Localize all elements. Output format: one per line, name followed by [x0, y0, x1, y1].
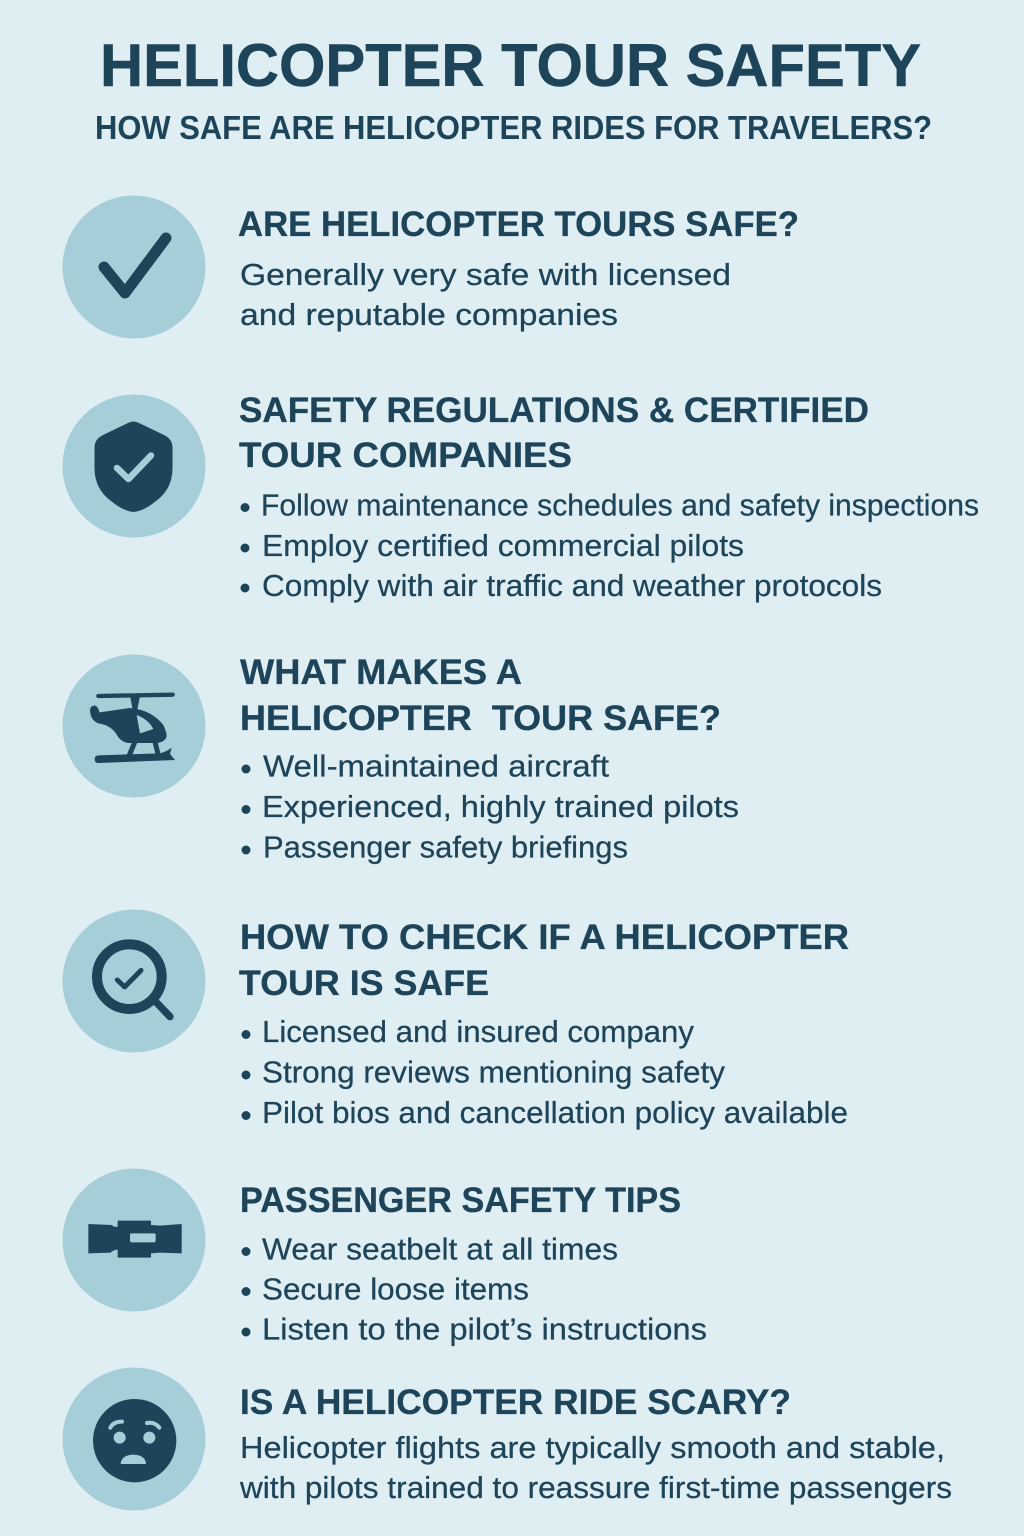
bullet list: safety factors: Well-maintained aircraft: [263, 748, 609, 784]
bullet list: checks: Licensed and insured company: [262, 1014, 694, 1049]
panel: how to check: [62, 910, 849, 1130]
bullet list: regulations: Employ certified commercial pilots: [262, 528, 744, 563]
panel: safety regulations: [62, 391, 979, 603]
bullet list: tips: [242, 1232, 707, 1346]
bullet list: safety factors: Experienced, highly trained pilots: [262, 789, 739, 824]
panel: passenger safety tips: [62, 1168, 707, 1346]
bullet list: safety factors: Passenger safety briefings: [263, 830, 628, 864]
text block: safety summary: [240, 257, 731, 332]
bullet list: regulations: Comply with air traffic and weather protocols: [262, 568, 882, 603]
bullet list: regulations: Follow maintenance schedules and safety inspections: [261, 488, 979, 522]
panel: is a helicopter ride scary: [62, 1368, 952, 1510]
bullet list: checks: [242, 1014, 848, 1130]
heading: safety regulations and certified tour companies: [239, 391, 869, 475]
bullet list: safety factors: [242, 748, 739, 864]
icon: seatbelt buckle: [62, 1168, 206, 1312]
heading: passenger safety tips: PASSENGER SAFETY TIPS: [240, 1181, 681, 1220]
heading: safety regulations and certified tour companies: TOUR COMPANIES: [239, 436, 572, 475]
heading: are helicopter tours safe: ARE HELICOPTER TOURS SAFE?: [238, 205, 799, 244]
icon: shield: [62, 394, 206, 538]
text block: safety summary: and reputable companies: [240, 297, 618, 332]
heading: safety regulations and certified tour companies: SAFETY REGULATIONS & CERTIFIED: [239, 391, 869, 430]
bullet list: checks: Pilot bios and cancellation policy available: [262, 1095, 848, 1130]
heading: what makes a helicopter tour safe: WHAT MAKES A: [240, 653, 522, 692]
heading: what makes a helicopter tour safe: [240, 653, 721, 738]
text block: reassurance: [239, 1430, 952, 1505]
bullet list: tips: Listen to the pilot’s instructions: [262, 1312, 707, 1346]
panel: what makes a tour safe: [62, 653, 739, 864]
icon: magnifier with check: [62, 910, 206, 1052]
subtitle: HOW SAFE ARE HELICOPTER RIDES FOR TRAVELERS?: [95, 109, 932, 146]
text block: reassurance: Helicopter flights are typically smooth and stable,: [240, 1430, 945, 1465]
heading: how to check if a helicopter tour is safe: HOW TO CHECK IF A HELICOPTER: [240, 918, 849, 957]
icon: check mark: [62, 196, 206, 338]
text block: reassurance: with pilots trained to reassure first-time passengers: [239, 1470, 952, 1505]
bullet list: regulations: [240, 488, 979, 603]
text block: safety summary: Generally very safe with licensed: [240, 257, 731, 292]
heading: how to check if a helicopter tour is safe: [239, 918, 849, 1003]
title: HELICOPTER TOUR SAFETY: [100, 32, 921, 99]
icon: worried face: [62, 1368, 206, 1510]
panel: are helicopter tours safe: [62, 196, 799, 338]
heading: is a helicopter ride scary: IS A HELICOPTER RIDE SCARY?: [240, 1383, 791, 1422]
heading: what makes a helicopter tour safe: HELICOPTER TOUR SAFE?: [240, 699, 721, 738]
bullet list: checks: Strong reviews mentioning safety: [262, 1054, 725, 1090]
bullet list: tips: Wear seatbelt at all times: [262, 1232, 618, 1266]
bullet list: tips: Secure loose items: [262, 1272, 529, 1306]
icon: helicopter: [62, 654, 206, 798]
heading: how to check if a helicopter tour is safe: TOUR IS SAFE: [239, 964, 489, 1003]
